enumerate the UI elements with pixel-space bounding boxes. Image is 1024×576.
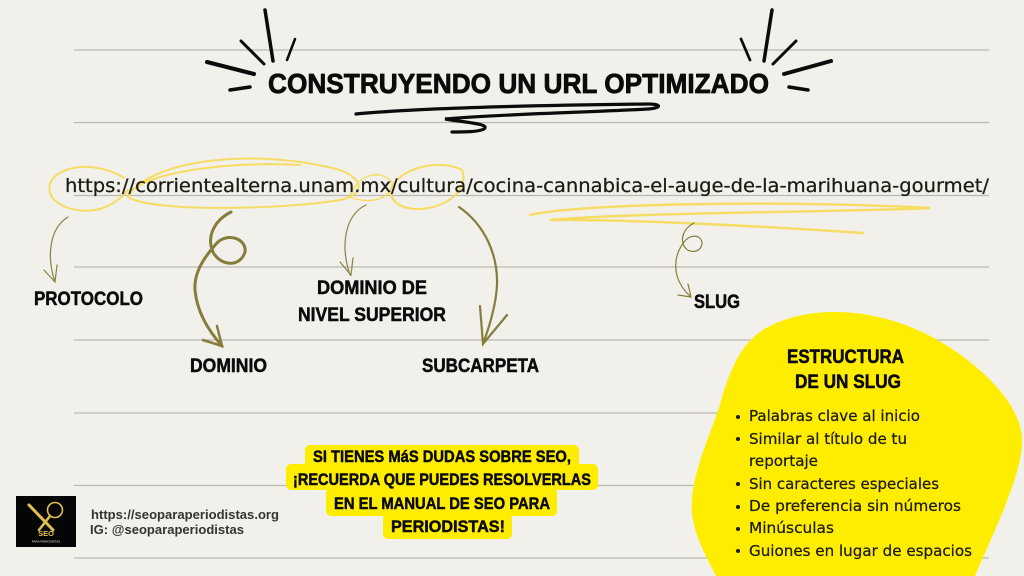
- bullet list: [736, 407, 972, 560]
- title underline swoosh: [356, 104, 658, 132]
- label: subcarpeta: SUBCARPETA: [422, 356, 539, 377]
- icon: left burst: [207, 10, 295, 90]
- label: protocolo: PROTOCOLO: [34, 289, 143, 310]
- callout text: EN EL MANUAL DE SEO PARA: [334, 494, 550, 513]
- arrow: protocolo: [44, 217, 68, 282]
- yellow blob: [692, 312, 1022, 576]
- logo: [16, 496, 76, 547]
- logo: SEO: [38, 529, 54, 538]
- title: [207, 10, 831, 132]
- logo: PARA PERIODISTAS: [32, 540, 60, 544]
- callout highlight: [286, 445, 598, 539]
- bullet list: Similar al título de tu: [749, 430, 907, 448]
- url highlight scribbles: [49, 159, 930, 233]
- label: dominio de nivel superior: NIVEL SUPERIOR: [298, 305, 446, 326]
- label: dominio de nivel superior: [298, 278, 446, 326]
- footer links: IG: @seoparaperiodistas: [90, 522, 244, 537]
- url text: https://corrientealterna.unam.mx/cultura/cocina-cannabica-el-auge-de-la-marihuana-gourmet/: [65, 175, 990, 197]
- bullet list: Palabras clave al inicio: [749, 407, 920, 425]
- callout text: PERIODISTAS!: [391, 517, 505, 536]
- panel: estructura de un slug: [692, 312, 1022, 576]
- panel heading: ESTRUCTURA: [787, 347, 904, 368]
- footer links: https://seoparaperiodistas.org: [91, 507, 279, 522]
- label: dominio de nivel superior: DOMINIO DE: [317, 278, 427, 299]
- icon: pencil and magnifier: [29, 502, 62, 530]
- icon: right burst: [741, 10, 831, 90]
- bullet list: reportaje: [749, 452, 818, 470]
- arrow: slug: [676, 223, 702, 297]
- bullet list: Minúsculas: [749, 519, 834, 537]
- title text: CONSTRUYENDO UN URL OPTIMIZADO: [268, 68, 769, 99]
- bullet list: Sin caracteres especiales: [749, 475, 939, 493]
- label: slug: SLUG: [694, 292, 740, 313]
- footer links: [90, 507, 279, 537]
- callout: [286, 445, 598, 539]
- bullet list: De preferencia sin números: [749, 497, 961, 515]
- arrow: subcarpeta: [459, 207, 507, 344]
- label: dominio: DOMINIO: [190, 356, 267, 377]
- callout text: SI TIENES MáS DUDAS SOBRE SEO,: [313, 447, 571, 466]
- callout text: [293, 447, 591, 536]
- panel heading: DE UN SLUG: [795, 372, 901, 393]
- panel heading: [787, 347, 904, 393]
- callout text: ¡RECUERDA QUE PUEDES RESOLVERLAS: [293, 470, 591, 489]
- arrow: dominio de nivel superior: [340, 205, 366, 275]
- bullet list: Guiones en lugar de espacios: [749, 542, 972, 560]
- arrow: dominio: [195, 212, 245, 346]
